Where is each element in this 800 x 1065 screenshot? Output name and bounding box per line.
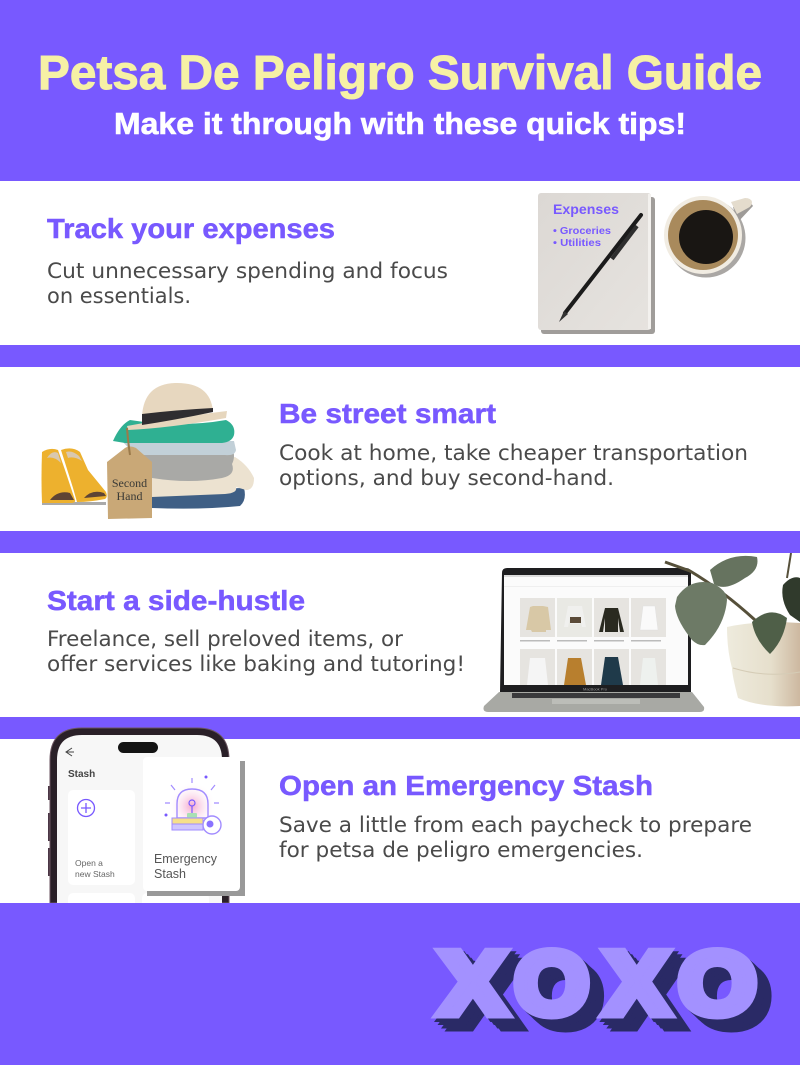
panel: track your expenses	[0, 181, 800, 345]
xoxo sign-off: O	[529, 948, 603, 1046]
text: track your expenses	[47, 259, 448, 308]
text: open an emergency stash: Save a little from each paycheck to prepare	[279, 813, 752, 837]
text: be street smart: options, and buy second-hand.	[279, 466, 614, 490]
text: start a side-hustle	[47, 627, 465, 676]
xoxo sign-off: X	[605, 935, 668, 1033]
icon: stack of clothes with hat	[113, 383, 254, 509]
heading: open an emergency stash: Open an Emergency Stash	[279, 770, 653, 801]
icon: phone stash screen: Stash	[68, 769, 95, 780]
icon: notebook with pen: Expenses	[553, 201, 619, 217]
icon: second hand tag: Second	[112, 476, 147, 490]
card: emergency stash: Emergency	[154, 852, 218, 866]
card: emergency stash	[143, 757, 245, 896]
xoxo sign-off: X	[454, 946, 520, 1045]
xoxo sign-off: O	[679, 934, 756, 1032]
icon: potted plant	[665, 553, 800, 706]
xoxo sign-off: O	[686, 940, 763, 1039]
icon: second hand tag	[107, 428, 152, 519]
icon: alarm siren	[164, 776, 221, 834]
xoxo sign-off: X	[608, 938, 672, 1036]
text: open an emergency stash	[279, 813, 752, 862]
heading: be street smart: Be street smart	[279, 398, 496, 429]
xoxo sign-off: O	[689, 944, 767, 1042]
text: be street smart: Cook at home, take cheaper transportation	[279, 441, 748, 465]
xoxo sign-off: O	[525, 944, 599, 1042]
heading: track your expenses: Track your expenses	[47, 213, 335, 244]
xoxo sign-off: X	[619, 948, 682, 1046]
panel: start a side-hustle	[0, 553, 800, 717]
header	[38, 47, 762, 141]
icon: yellow shoes	[42, 448, 107, 505]
icon: second hand tag: Hand	[116, 489, 142, 503]
icon: notebook with pen: • Groceries	[553, 225, 611, 237]
xoxo sign-off: O	[682, 937, 760, 1035]
xoxo sign-off: X	[447, 940, 513, 1039]
xoxo sign-off: X	[450, 943, 516, 1042]
xoxo sign-off: X	[612, 941, 675, 1039]
icon: laptop shop: MacBook Pro	[583, 686, 608, 692]
icon: phone stash screen: Open a	[75, 858, 103, 868]
icon: phone stash screen	[48, 728, 229, 913]
text: track your expenses: Cut unnecessary spending and focus	[47, 259, 448, 283]
xoxo sign-off	[440, 933, 770, 1046]
xoxo sign-off: X	[440, 933, 506, 1032]
text: start a side-hustle: offer services like baking and tutoring!	[47, 652, 465, 676]
xoxo sign-off: O	[518, 938, 592, 1036]
icon: notebook with pen	[538, 193, 655, 334]
subtitle: Make it through with these quick tips!	[114, 106, 686, 141]
xoxo sign-off: O	[693, 947, 770, 1045]
heading: start a side-hustle: Start a side-hustle	[47, 585, 305, 616]
text: open an emergency stash: for petsa de peligro emergencies.	[279, 838, 643, 862]
xoxo sign-off: O	[515, 935, 589, 1033]
text: be street smart	[279, 441, 748, 490]
icon: notebook with pen: • Utilities	[553, 237, 601, 249]
text: start a side-hustle: Freelance, sell preloved items, or	[47, 627, 403, 651]
text: track your expenses: on essentials.	[47, 284, 191, 308]
icon: phone stash screen: new Stash	[75, 869, 115, 879]
card: emergency stash: Stash	[154, 867, 186, 881]
panel: open an emergency stash	[0, 728, 800, 913]
xoxo sign-off: O	[522, 941, 596, 1039]
icon: coffee cup	[664, 196, 753, 278]
icon: laptop shop	[484, 568, 704, 712]
xoxo sign-off: X	[444, 937, 509, 1036]
xoxo sign-off: X	[616, 944, 679, 1042]
panel: be street smart	[0, 367, 800, 531]
title: Petsa De Peligro Survival Guide	[38, 47, 762, 100]
